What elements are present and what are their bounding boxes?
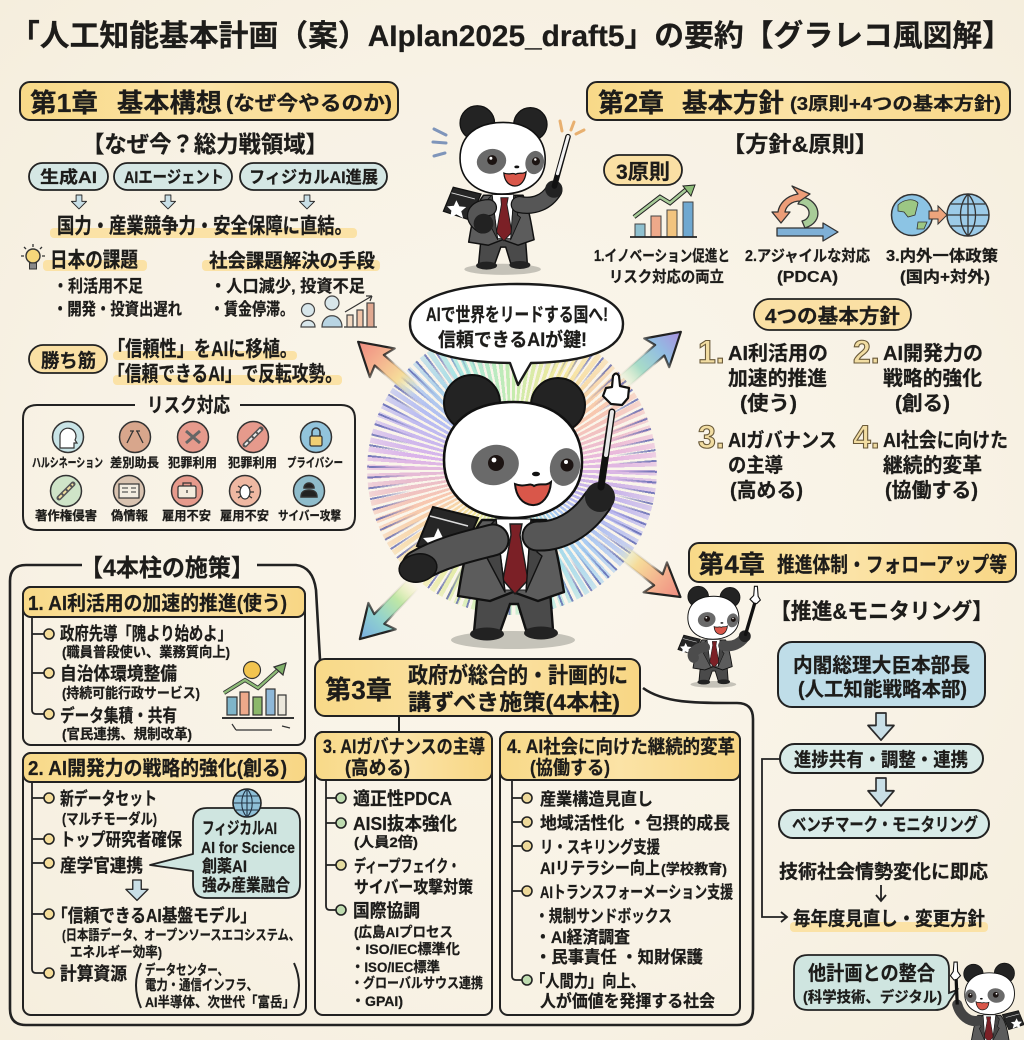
character: bottom right panda <box>950 962 1024 1040</box>
pillar 2 body <box>23 753 306 1015</box>
pillar 3 header: 3. AIガバナンスの主導 <box>323 736 485 758</box>
chapter 1 heading <box>20 82 398 120</box>
principle labels: 2.アジャイルな対応 <box>745 247 870 265</box>
policy 4: (協働する) <box>885 479 978 502</box>
pill: benchmark monitoring: ベンチマーク・モニタリング <box>792 814 978 835</box>
pill: 4 basic policies <box>754 299 911 330</box>
Japan's challenges: ・利活用不足 <box>53 277 143 296</box>
pill: 3 principles <box>604 155 682 185</box>
principle labels: 3.内外一体政策 <box>886 246 999 265</box>
means of solving social issues: ・人口減少, 投資不足 <box>210 277 365 296</box>
small arrows down <box>71 195 315 209</box>
winning strategy: 「信頼できるAI」で反転攻勢。 <box>108 363 342 386</box>
pillar 1 body <box>23 587 305 745</box>
pillar 3 items: サイバー攻撃対策 <box>354 877 473 897</box>
arrow down 1 <box>868 713 894 740</box>
chapter 2 heading: (3原則+4つの基本方針) <box>790 93 1001 114</box>
policy 3: (高める) <box>730 479 803 502</box>
pillar 4 items: 地域活性化 ・包摂的成長 <box>540 813 730 833</box>
chapter 1 heading: 第1章 <box>30 88 98 118</box>
pillar 1 items: 政府先導「隗より始めよ」 <box>60 624 232 644</box>
risk labels: 雇用不安 <box>220 508 269 523</box>
pill: progress sharing: 進捗共有・調整・連携 <box>794 749 968 771</box>
pillar 2 items: 新データセット <box>60 788 157 809</box>
feedback bracket arrow <box>762 759 787 922</box>
pillar 2 items: データセンター、 <box>145 962 228 978</box>
risk labels: 著作権侵害 <box>35 508 97 523</box>
arrow: to chapter 2 <box>610 317 693 397</box>
risk labels <box>32 455 343 523</box>
panel: risk response <box>23 394 355 530</box>
pillar 3 header: (高める) <box>345 757 410 779</box>
radiant rainbow glow behind central panda <box>367 351 657 615</box>
pillar 1 items: (持続可能行政サービス) <box>62 685 200 701</box>
arrow: to chapter 4 <box>607 534 692 612</box>
pillar 2 items <box>52 788 300 1010</box>
Japan's challenges <box>43 249 182 319</box>
panel: pillar 2 AI development <box>23 753 306 1015</box>
pillar 2 items: 電力・通信インフラ、 <box>145 977 258 993</box>
arrow: to chapter 1 <box>346 327 429 407</box>
policy 4 <box>853 419 1008 502</box>
principle labels: (国内+対外) <box>900 267 990 286</box>
risk labels: 犯罪利用 <box>168 455 217 470</box>
policy 1: AI利活用の <box>728 342 828 365</box>
policy 2: 2. <box>853 334 880 370</box>
callout: physical AI topics: AI for Science <box>201 840 295 857</box>
pillar 3 items: 適正性PDCA <box>353 789 452 809</box>
means of solving social issues <box>202 250 380 319</box>
icon: globe <box>233 789 261 817</box>
pill: benchmark monitoring <box>779 810 989 838</box>
parentheses around compute resources <box>136 963 299 1008</box>
pillar 4 body <box>500 732 740 1015</box>
pillar 4 tree <box>512 780 532 985</box>
winning strategy: 勝ち筋 <box>41 350 96 372</box>
pillar 1 header: 1. AI利活用の加速的推進(使う) <box>28 592 287 615</box>
chapter 3 heading <box>315 659 640 716</box>
speech bubble: 信頼できるAIが鍵! <box>438 328 587 351</box>
panel: four pillars frame <box>10 565 753 1025</box>
subheading why now: 【なぜ今？総力戦領域】 <box>82 131 328 157</box>
pillar 4 items <box>531 790 733 1011</box>
icon: rising bar chart <box>630 185 697 237</box>
policy 3: AIガバナンス <box>728 429 837 452</box>
pillar 3 items: ・GPAI) <box>351 993 403 1009</box>
policy 3 <box>698 419 837 502</box>
winning strategy: 「信頼性」をAIに移植。 <box>108 338 297 361</box>
pillar 4 items: (学校教育) <box>661 861 727 877</box>
highlight statement: 国力・産業競争力・安全保障に直結。 <box>57 215 352 238</box>
risk frame <box>23 405 355 530</box>
pillar 1 items: 自治体環境整備 <box>60 664 177 684</box>
callout: physical AI topics <box>150 808 300 898</box>
policy 1: 1. <box>698 334 725 370</box>
risk heading: リスク対応 <box>147 394 230 417</box>
speech bubble: AIで世界をリードする国へ! <box>426 304 608 326</box>
pillar 3 items: ディープフェイク・ <box>354 856 460 876</box>
box: prime minister headquarters: (人工知能戦略本部) <box>798 677 967 701</box>
panel: pillar 3 AI governance <box>315 732 492 1015</box>
pillar 4 items: ・民事責任 ・知財保護 <box>535 948 703 967</box>
callout: physical AI topics: フィジカルAI <box>202 819 277 838</box>
pills: technology drivers <box>29 163 387 190</box>
subheading policy and principles: 【方針&原則】 <box>722 132 878 157</box>
chapter 2 heading: 基本方針 <box>682 88 784 118</box>
callout: physical AI topics: 強み産業融合 <box>202 876 290 895</box>
chapter 2 heading <box>587 82 1010 120</box>
pillar 1 items: データ集積・共有 <box>60 705 177 726</box>
callout: physical AI topics: 創薬AI <box>202 857 247 876</box>
pillar 3 items: ・グローバルサウス連携 <box>351 975 483 991</box>
pillar 2 items: (マルチモーダル) <box>62 810 157 828</box>
speech bubble <box>410 284 623 385</box>
pills: technology drivers: AIエージェント <box>124 168 224 187</box>
pillar 4 items: AIリテラシー向上 <box>540 859 660 878</box>
chapter 2 heading: 第2章 <box>598 88 664 118</box>
risk labels: 偽情報 <box>111 508 148 523</box>
pillar 4 items: AIトランスフォーメーション支援 <box>540 882 733 902</box>
pillar 3 items: (広島AIプロセス <box>354 924 453 940</box>
heading: four pillars measures: 【4本柱の施策】 <box>80 555 254 582</box>
icon: agile cycle <box>772 186 838 241</box>
pill: progress sharing <box>780 744 983 773</box>
callout: alignment with other plans: 他計画との整合 <box>808 962 935 985</box>
pillar 4 items: ・規制サンドボックス <box>535 907 672 926</box>
pillar 4 header: (協働する) <box>530 757 610 779</box>
pillar 2 items: 産学官連携 <box>60 855 143 876</box>
pillar 4 items: 人が価値を発揮する社会 <box>540 991 715 1011</box>
pillar 4 header <box>500 732 740 780</box>
pillar 4 items: 「人間力」向上、 <box>531 972 645 991</box>
icon: growth chart with coin <box>222 662 294 730</box>
pills: technology drivers: 生成AI <box>40 167 97 187</box>
pillar 4 items: リ・スキリング支援 <box>540 837 660 857</box>
chapter 4 heading <box>689 543 1016 582</box>
chapter 1 heading: 基本構想 <box>117 88 222 118</box>
chapter 3 heading: 政府が総合的・計画的に <box>408 663 628 688</box>
pillar 2 items: エネルギー効率) <box>70 944 162 960</box>
pill: 3 principles: 3原則 <box>616 161 670 184</box>
box: prime minister headquarters: 内閣総理大臣本部長 <box>793 654 970 677</box>
winning strategy <box>29 338 342 386</box>
icon: sparkle marks around top panda <box>433 121 584 156</box>
icon: globes <box>892 194 989 236</box>
panel: chapter 1 basic concept <box>20 82 398 530</box>
policy 4: 継続的変革 <box>883 454 982 477</box>
risk labels: ハルシネーション <box>32 456 103 470</box>
pillar 3 items: ・ISO/IEC標準化 <box>351 941 460 957</box>
pillar 4 items: ・AI経済調査 <box>535 928 630 947</box>
pillar 3 items: 国際協調 <box>353 901 420 921</box>
panel: chapter 4 promotion structure <box>689 543 1016 1010</box>
panel: pillar 1 AI use <box>23 587 305 745</box>
connector from chapter 3 <box>398 716 400 732</box>
thin arrow <box>876 885 886 901</box>
policy 4: 4. <box>853 419 880 455</box>
pill: 4 basic policies: 4つの基本方針 <box>765 305 900 328</box>
policy 2: 戦略的強化 <box>883 366 982 390</box>
subheading promotion and monitoring: 【推進&モニタリング】 <box>770 599 993 624</box>
pillar 3 items: (人員2倍) <box>354 834 418 850</box>
pillar 3 items <box>351 789 483 1009</box>
pillar 2 header: 2. AI開発力の戦略的強化(創る) <box>28 756 287 780</box>
pillar 1 items <box>60 624 232 742</box>
pillar 2 items: (日本語データ、オープンソースエコシステム、 <box>62 927 300 943</box>
pillar 2 items: 計算資源 <box>60 963 127 984</box>
policy 3: 3. <box>698 419 725 455</box>
risk labels: 雇用不安 <box>162 508 211 523</box>
policy 1: 加速的推進 <box>728 367 827 390</box>
pillar 4 header: 4. AI社会に向けた継続的変革 <box>507 736 735 758</box>
principle labels: 1.イノベーション促進と <box>594 247 730 265</box>
pillar 3 header <box>315 732 492 780</box>
pills: technology drivers: フィジカルAI進展 <box>249 168 378 187</box>
character: central panda with wand <box>397 374 629 649</box>
pillar 3 items: AISI抜本強化 <box>353 814 457 834</box>
pillar 3 body <box>315 732 492 1015</box>
pillar 3 items: ・ISO/IEC標準 <box>351 959 440 975</box>
pillar 1 items: (職員普段使い、業務質向上) <box>62 644 230 660</box>
risk labels: プライバシー <box>287 456 343 470</box>
principle labels: (PDCA) <box>777 269 838 286</box>
icon: light bulb <box>21 244 45 269</box>
means of solving social issues: ・賃金停滞。 <box>210 299 294 319</box>
character: small panda chapter 4 <box>678 586 760 688</box>
Japan's challenges: 日本の課題 <box>50 249 138 272</box>
policy 2: AI開発力の <box>883 342 983 365</box>
pillar 3 tree <box>326 780 346 915</box>
pillar 4 items: 産業構造見直し <box>540 790 653 809</box>
policy 2 <box>853 334 983 415</box>
risk labels: サイバー攻撃 <box>278 508 341 523</box>
pillar 2 tree <box>32 782 54 978</box>
arrow down 2 <box>868 778 894 806</box>
pillar 1 items: (官民連携、規制改革) <box>62 726 192 742</box>
means of solving social issues: 社会課題解決の手段 <box>209 250 375 272</box>
risk labels: 差別助長 <box>110 455 159 470</box>
chapter 3 heading: 第3章 <box>325 675 392 705</box>
chapter 4 heading: 第4章 <box>698 551 765 579</box>
box: prime minister headquarters <box>778 642 985 707</box>
principle labels: リスク対応の両立 <box>609 268 724 286</box>
highlighted annual review: 毎年度見直し・変更方針 <box>793 907 985 930</box>
risk labels: 犯罪利用 <box>228 455 277 470</box>
policy 1 <box>698 334 828 415</box>
policy 3: の主導 <box>728 453 783 477</box>
pillar 2 items: トップ研究者確保 <box>60 830 182 850</box>
chapter 1 heading: (なぜ今やるのか) <box>226 92 392 115</box>
chapter 3 heading: 講ずべき施策(4本柱) <box>408 690 620 715</box>
policy 4: AI社会に向けた <box>883 429 1008 452</box>
principle labels <box>594 246 999 286</box>
pillar 2 items: AI半導体、次世代「富岳」 <box>145 994 295 1010</box>
pillar 2 items: 「信頼できるAI基盤モデル」 <box>52 905 256 926</box>
policy 1: (使う) <box>740 392 797 415</box>
Japan's challenges: ・開発・投資出遅れ <box>53 300 182 319</box>
risk icons <box>50 422 332 506</box>
text: respond to changes: 技術社会情勢変化に即応 <box>779 860 988 883</box>
policy 2: (創る) <box>895 392 950 415</box>
title: 「人工知能基本計画（案）AIplan2025_draft5」の要約【グラレコ風図解】 <box>10 20 1012 53</box>
icon: people and rising chart <box>301 296 377 327</box>
panel: chapter 2 basic policy <box>587 82 1010 502</box>
arrow: to chapter 3 <box>346 570 428 652</box>
panel: pillar 4 AI society <box>500 732 740 1015</box>
arrow down to foundation model <box>126 880 148 900</box>
pillar 1 tree <box>32 617 54 719</box>
callout: alignment with other plans: (科学技術、デジタル) <box>803 988 942 1006</box>
callout: alignment with other plans <box>794 955 957 1010</box>
character: top panda with pointer <box>443 106 568 275</box>
